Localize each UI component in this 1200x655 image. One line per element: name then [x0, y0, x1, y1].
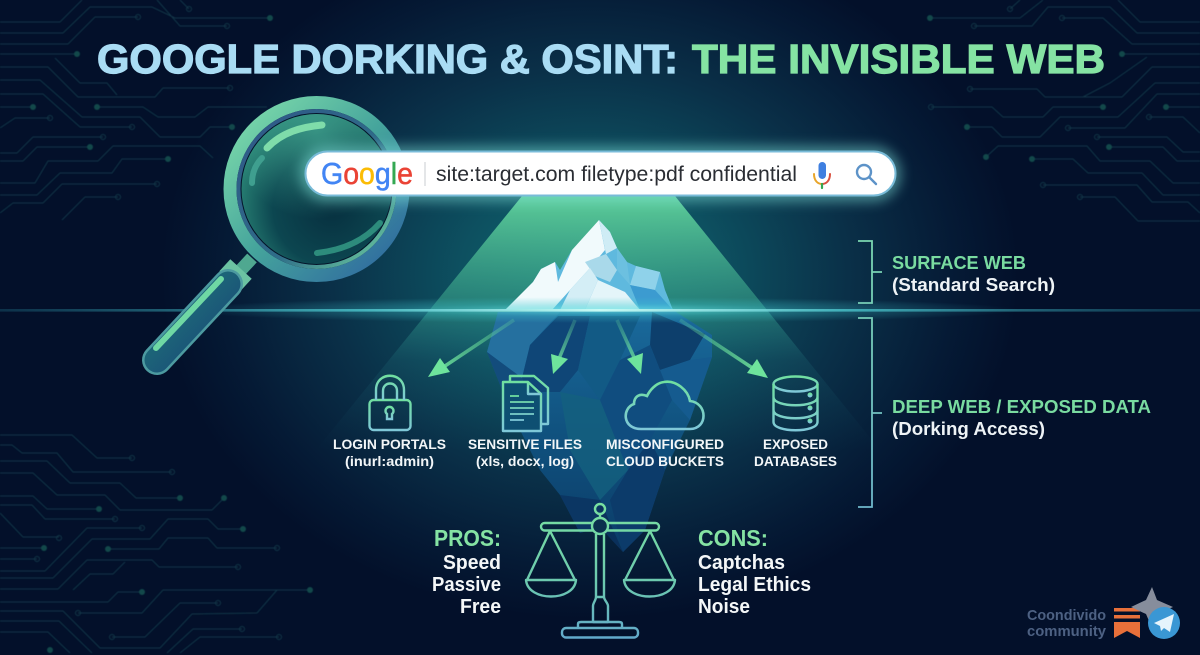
label: standard search: (Standard Search)	[892, 275, 1055, 295]
Google logo: Google	[321, 156, 413, 191]
label: login portals: LOGIN PORTALS	[333, 436, 446, 452]
arrow to databases	[680, 320, 768, 378]
arrows from iceberg	[428, 320, 768, 378]
cons list: Legal Ethics	[698, 574, 811, 596]
item: exposed databases	[754, 376, 837, 469]
title part one: GOOGLE DORKING & OSINT:	[97, 36, 678, 82]
pros list: Passive	[432, 574, 501, 596]
icon: cloud	[626, 382, 704, 429]
label: sensitive files: (xls, docx, log)	[476, 453, 574, 469]
label: sensitive files: SENSITIVE FILES	[468, 436, 582, 452]
magnifier rim and lens	[230, 102, 403, 276]
icon: balance scale	[526, 504, 675, 638]
icon: orange bookmark	[1114, 608, 1140, 638]
item: sensitive files	[468, 376, 582, 469]
icon: documents	[503, 376, 548, 431]
iceberg underwater mass	[487, 310, 712, 552]
icon: padlock	[370, 376, 410, 430]
magnifier handle	[156, 258, 252, 360]
search beam	[316, 196, 880, 450]
iceberg surface tip	[505, 220, 673, 310]
title	[97, 36, 1105, 82]
community logo	[1027, 587, 1180, 640]
pros list: Free	[460, 596, 501, 618]
logo wordmark: community	[1027, 623, 1107, 640]
pros list: Speed	[443, 552, 501, 574]
waterline	[0, 297, 1200, 323]
label: dorking access: (Dorking Access)	[892, 419, 1045, 439]
title part two: THE INVISIBLE WEB	[692, 36, 1105, 82]
cons list: CONS:	[698, 525, 768, 551]
label: exposed databases: EXPOSED	[763, 436, 828, 452]
cons list	[698, 525, 811, 618]
pros list: PROS:	[434, 525, 501, 551]
label: login portals: (inurl:admin)	[345, 453, 434, 469]
item: login portals	[333, 376, 446, 469]
search bar	[300, 146, 901, 202]
label: surface web: SURFACE WEB	[892, 253, 1026, 273]
logo wordmark: Coondivido	[1027, 607, 1106, 624]
icon: search magnifier	[857, 165, 876, 184]
icon: microphone	[814, 162, 830, 188]
icon: telegram badge	[1148, 607, 1180, 639]
search query: site:target.com filetype:pdf confidential	[436, 163, 797, 186]
label: exposed databases: DATABASES	[754, 453, 837, 469]
label: cloud buckets: CLOUD BUCKETS	[606, 453, 724, 469]
arrow to login portals	[428, 320, 514, 377]
pros list	[432, 525, 501, 618]
icon: database	[774, 376, 818, 430]
arrow to cloud buckets	[617, 320, 643, 374]
label: deep web: DEEP WEB / EXPOSED DATA	[892, 397, 1151, 417]
label: cloud buckets: MISCONFIGURED	[606, 436, 724, 452]
surface web bracket and label	[858, 241, 1055, 303]
icon: grey star	[1131, 587, 1173, 628]
item: cloud buckets	[606, 382, 724, 469]
arrow to sensitive files	[551, 320, 575, 374]
cons list: Noise	[698, 596, 750, 618]
cons list: Captchas	[698, 552, 785, 574]
magnifying glass	[156, 102, 403, 360]
deep web bracket and label	[858, 318, 1151, 507]
iceberg	[487, 220, 712, 552]
